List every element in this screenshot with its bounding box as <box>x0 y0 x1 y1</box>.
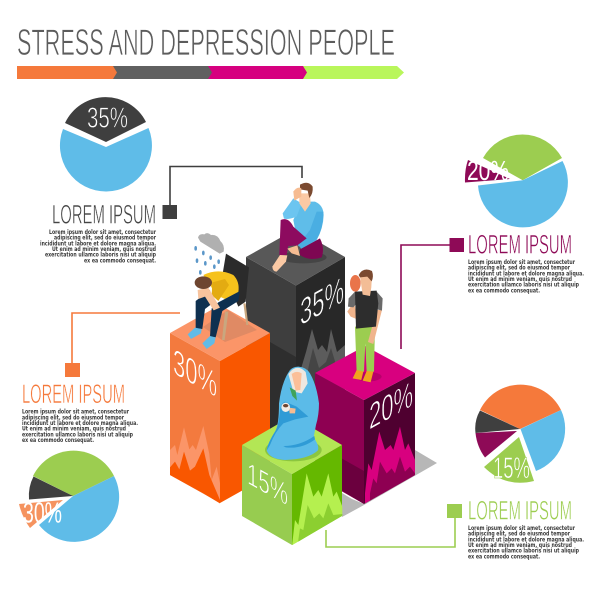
heading: top left: LOREM IPSUM <box>52 200 156 230</box>
arrow progress bar <box>17 66 404 79</box>
body: top right: adipiscing elit, sed do eiusmod tempor <box>468 266 570 272</box>
column: green 15%: 15% <box>247 456 288 513</box>
zigzag: orange column <box>170 426 220 503</box>
column: dark 35%: 35% <box>300 269 344 334</box>
column: green 15% <box>242 416 342 545</box>
body: left: ex ea commodo consequat. <box>22 438 94 444</box>
pie chart: 20%: 20% <box>467 155 509 186</box>
figure: man with head in hand <box>272 183 327 272</box>
body: top left <box>40 230 156 264</box>
column: magenta 20%: 20% <box>369 374 413 438</box>
pie chart: 35%: 35% <box>87 102 128 134</box>
zigzag: dark column <box>300 329 345 400</box>
text block: bottom right <box>468 496 584 560</box>
body: bottom right: Ut enim ad minim veniam, quis nostrud <box>468 543 572 549</box>
body: top left: ex ea commodo consequat. <box>84 258 156 264</box>
connector: purple <box>401 245 450 349</box>
body: top left: incididunt ut labore et dolore magna aliqua. <box>40 241 156 247</box>
body: top right: exercitation ullamco laboris nisi ut aliquip <box>468 283 579 289</box>
zigzag: magenta column <box>365 427 415 503</box>
body: top right <box>468 260 584 294</box>
column: dark 35% <box>246 229 345 440</box>
column: orange 30%: 30% <box>173 341 217 406</box>
zigzag: green column <box>292 473 342 545</box>
body: bottom right: ex ea commodo consequat. <box>468 554 540 560</box>
pie chart: 35% <box>60 97 152 191</box>
body: bottom right: exercitation ullamco laboris nisi ut aliquip <box>468 549 579 555</box>
body: left: exercitation ullamco laboris nisi ut aliquip <box>22 432 133 438</box>
body: left: Lorem ipsum dolor sit amet, consectetur <box>22 410 129 416</box>
body: left <box>22 410 138 444</box>
marker: green square <box>447 504 462 518</box>
figure: woman in blanket <box>265 367 322 461</box>
heading: left: LOREM IPSUM <box>22 379 125 409</box>
text block: left <box>22 379 138 444</box>
body: top right: ex ea commodo consequat. <box>468 288 540 294</box>
text block: top left <box>40 200 156 264</box>
body: top right: Ut enim ad minim veniam, quis nostrud <box>468 277 572 283</box>
column: orange 30% <box>170 305 270 503</box>
pie chart: 15%: 15% <box>493 452 530 485</box>
body: bottom right: Lorem ipsum dolor sit amet, consectetur <box>468 526 575 532</box>
pie chart: 30% <box>19 451 119 542</box>
marker: dark square <box>162 205 177 219</box>
body: left: incididunt ut labore et dolore magna aliqua. <box>22 421 138 427</box>
body: top left: exercitation ullamco laboris nisi ut aliquip <box>45 253 156 259</box>
body: top right: Lorem ipsum dolor sit amet, consectetur <box>468 260 575 266</box>
pie chart: 30%: 30% <box>23 498 62 530</box>
body: top left: adipiscing elit, sed do eiusmod tempor <box>54 236 156 242</box>
body: top left: Ut enim ad minim veniam, quis nostrud <box>52 247 156 253</box>
body: bottom right: adipiscing elit, sed do eiusmod tempor <box>468 532 570 538</box>
body: top left: Lorem ipsum dolor sit amet, consectetur <box>49 230 156 236</box>
column: magenta 20% <box>315 346 415 504</box>
marker: purple square <box>450 238 464 252</box>
figure: man holding mask <box>347 270 383 382</box>
body: bottom right <box>468 526 584 560</box>
figure: man on chair under rain cloud <box>188 233 249 349</box>
pie chart: 15% <box>475 385 565 485</box>
connector: orange <box>72 313 180 364</box>
connector: green <box>326 518 455 547</box>
icon: rain cloud <box>198 233 224 254</box>
body: left: adipiscing elit, sed do eiusmod tempor <box>22 415 124 421</box>
pie chart: 20% <box>465 135 568 227</box>
icon: rain drops <box>194 246 220 275</box>
marker: orange square <box>65 363 80 377</box>
text block: top right <box>468 230 584 294</box>
floor shadow <box>342 450 437 517</box>
body: left: Ut enim ad minim veniam, quis nostrud <box>22 427 126 433</box>
connector: dark <box>170 166 302 206</box>
